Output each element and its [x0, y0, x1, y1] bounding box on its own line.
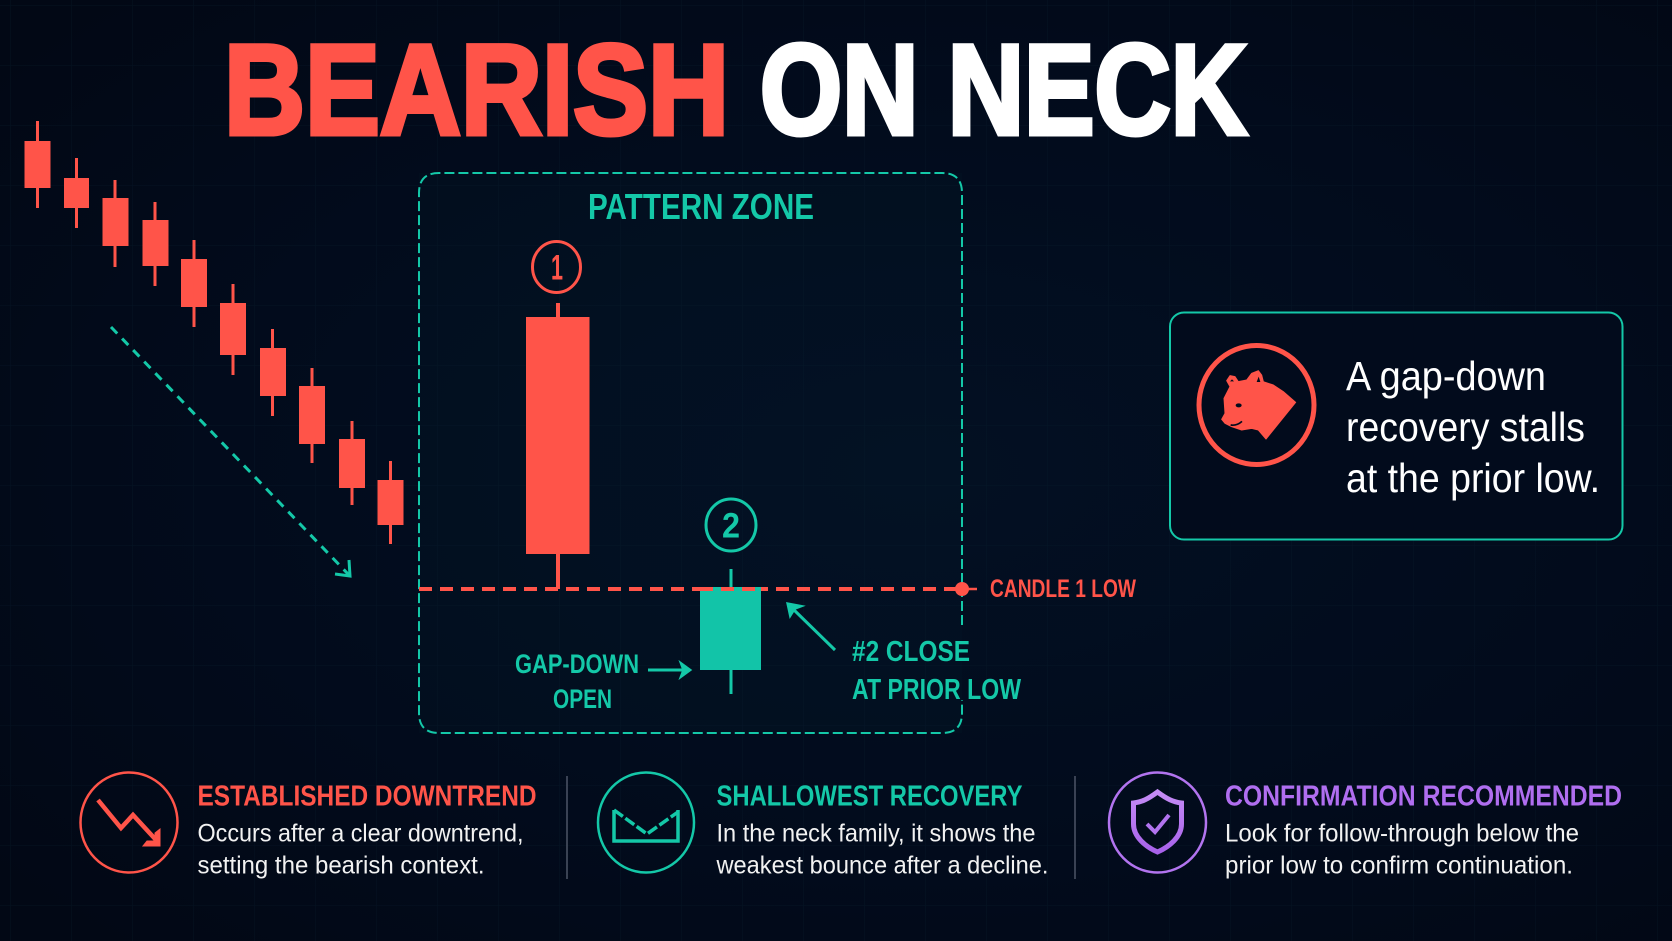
candle 2 — [700, 569, 761, 694]
icon: shallow neck — [598, 772, 694, 872]
description: prior low to confirm continuation. — [1225, 852, 1573, 880]
label: gap-down open: GAP-DOWN — [515, 649, 639, 679]
label: gap-down open — [515, 649, 639, 714]
badge 2: 2 — [722, 506, 740, 546]
heading: shallowest recovery: SHALLOWEST RECOVERY — [716, 780, 1022, 812]
description: Look for follow-through below the — [1225, 820, 1579, 848]
panel: established downtrend — [80, 772, 536, 880]
icon: bear head — [1199, 346, 1314, 464]
description — [716, 820, 1048, 880]
callout text: at the prior low. — [1346, 455, 1600, 501]
description — [198, 820, 524, 880]
panel: pattern zone — [419, 173, 962, 733]
label: close at prior low: AT PRIOR LOW — [852, 674, 1021, 706]
heading: established downtrend: ESTABLISHED DOWNTREND — [198, 780, 536, 812]
label: candle 1 low: CANDLE 1 LOW — [990, 575, 1136, 603]
description: Occurs after a clear downtrend, — [198, 820, 524, 848]
panel: confirmation recommended — [1109, 772, 1622, 880]
description: setting the bearish context. — [198, 852, 484, 880]
downtrend candlesticks — [24, 121, 404, 544]
heading: pattern zone: PATTERN ZONE — [588, 186, 814, 227]
candle 1 low line — [419, 575, 1136, 603]
label: close at prior low — [852, 636, 1021, 706]
badge 1: 1 — [551, 248, 563, 288]
panel: shallowest recovery — [598, 772, 1048, 880]
label: gap-down open: OPEN — [553, 684, 612, 714]
description: weakest bounce after a decline. — [716, 852, 1048, 880]
icon: falling chart arrow — [80, 772, 178, 872]
candle 1 — [526, 303, 590, 589]
callout text — [1346, 353, 1600, 501]
badge 1 — [532, 242, 580, 292]
title: BEARISH — [224, 19, 729, 162]
title: ON NECK — [760, 19, 1247, 162]
arrow: gap-down open — [648, 662, 691, 678]
badge 2 — [706, 499, 756, 551]
arrow: downtrend direction — [111, 327, 350, 576]
description — [1225, 820, 1579, 880]
description: In the neck family, it shows the — [716, 820, 1036, 848]
title — [224, 19, 1247, 162]
arrow: close at prior low — [787, 603, 835, 650]
callout — [1170, 312, 1622, 540]
icon: shield check — [1109, 772, 1206, 872]
callout text: recovery stalls — [1346, 404, 1585, 450]
callout text: A gap-down — [1346, 353, 1546, 399]
label: close at prior low: #2 CLOSE — [852, 636, 970, 668]
